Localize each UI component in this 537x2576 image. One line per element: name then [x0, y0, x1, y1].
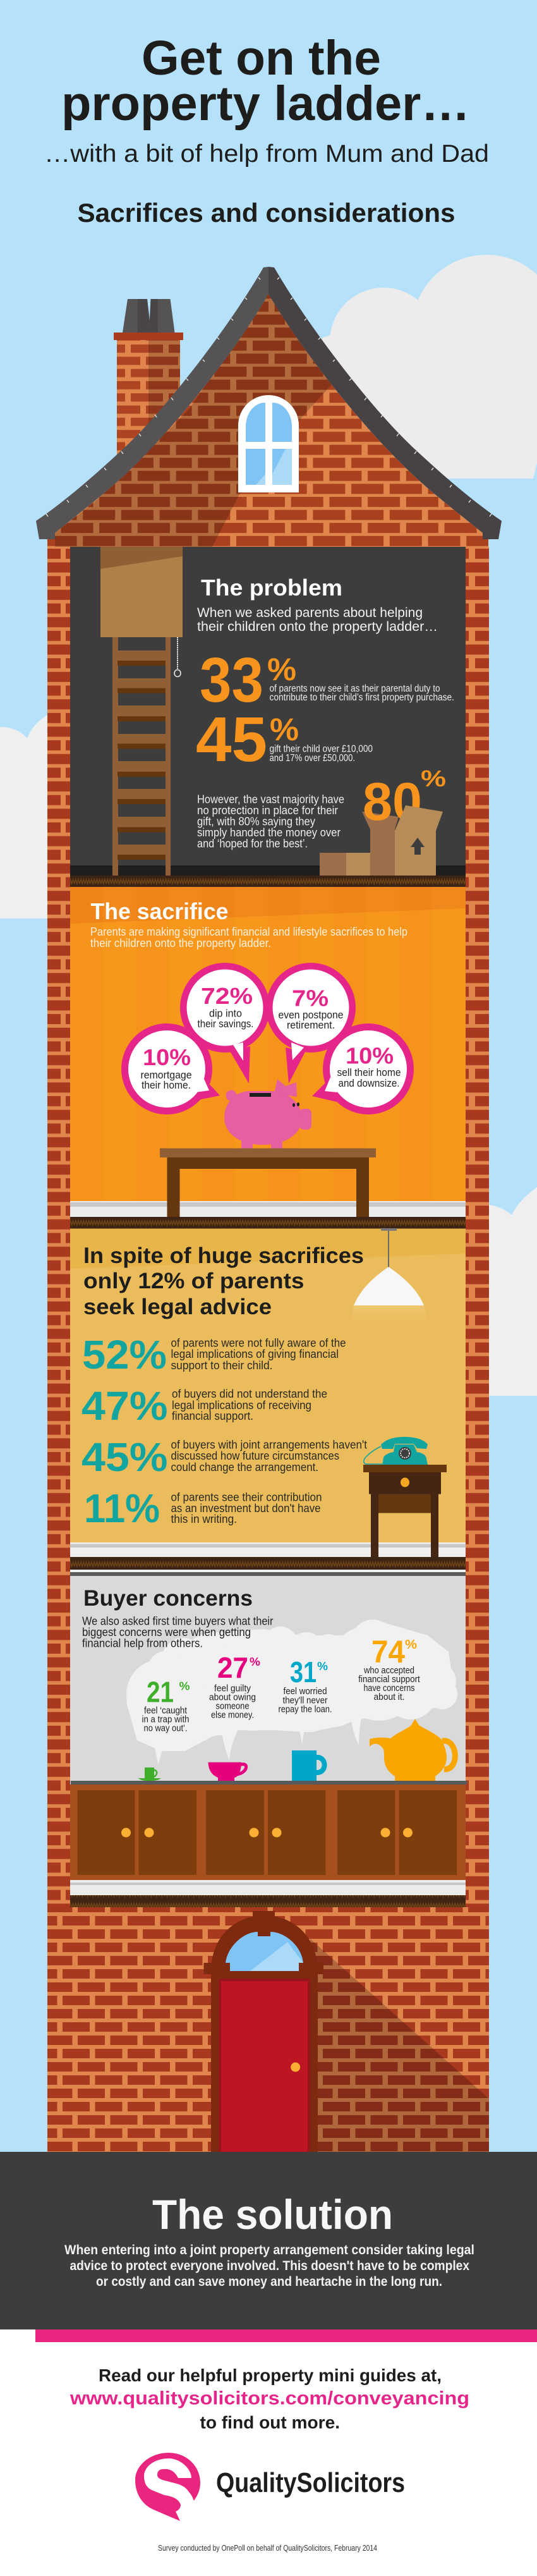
bubble: 10% downsize: 10% — [346, 1043, 394, 1068]
panel: the solution — [0, 2152, 537, 2329]
gable wall with window shadow — [47, 293, 488, 550]
stat: 45%: of buyers with joint arrangements haven't — [171, 1438, 367, 1451]
icon: orange teapot — [370, 1719, 455, 1781]
stat: 52% — [82, 1332, 346, 1377]
panel: legal advice — [70, 1228, 466, 1557]
panel: the sacrifice — [70, 887, 466, 1217]
heading: the solution: The solution — [152, 2191, 393, 2238]
stat: 27%: feel guilty — [214, 1683, 251, 1694]
window: attic — [238, 395, 299, 492]
heading: sacrifices and considerations: Sacrifices and considerations — [77, 198, 455, 228]
pink bar — [35, 2329, 537, 2342]
stat: 27% — [209, 1651, 260, 1721]
stat: 33% — [200, 645, 454, 716]
stat: 21%: 21 — [147, 1676, 174, 1709]
stat: 11%: as an investment but don't have — [171, 1501, 321, 1515]
moving boxes with 80%: % — [421, 766, 446, 791]
stat: 27%: 27 — [217, 1651, 248, 1684]
stat: 45% — [81, 1434, 367, 1480]
worktop and cupboards — [70, 1781, 467, 1880]
bubble: 10% remortgage: their home. — [142, 1079, 191, 1091]
logo: QualitySolicitors — [135, 2453, 405, 2521]
roof — [36, 267, 502, 539]
text: vast majority: gift, with 80% saying they — [197, 814, 316, 828]
text: vast majority — [197, 793, 344, 850]
stat: 11%: this in writing. — [171, 1512, 237, 1525]
call to action: Read our helpful property mini guides at, — [99, 2365, 442, 2385]
cloud: middle left — [0, 713, 63, 919]
call to action: www.qualitysolicitors.com/conveyancing — [69, 2388, 469, 2409]
stat: 45%: could change the arrangement. — [171, 1460, 318, 1474]
stat: 74%: financial support — [358, 1674, 420, 1685]
intro text: biggest concerns were when getting — [82, 1625, 251, 1639]
stat: 31%: % — [317, 1660, 328, 1673]
skirting board — [70, 1201, 466, 1217]
icon: blue mug — [292, 1750, 325, 1781]
stat: 45% — [196, 704, 373, 775]
floor joists 3 — [70, 1557, 466, 1570]
stat: 47%: 47% — [81, 1383, 168, 1429]
bubble: 7% — [278, 985, 344, 1031]
door shadow — [310, 1939, 489, 2152]
bubble: 10% remortgage: 10% — [143, 1044, 191, 1070]
stat: 74%: about it. — [374, 1692, 404, 1702]
ladder — [112, 637, 171, 876]
stat: 21% — [142, 1676, 190, 1734]
text: vast majority: and ‘hoped for the best’. — [197, 837, 308, 850]
floor joists 2 — [70, 1217, 466, 1229]
stat: 33%: 33 — [200, 645, 263, 716]
skirting board — [70, 1542, 466, 1557]
stat: 45%: gift their child over £10,000 — [269, 743, 373, 755]
intro text: financial help from others. — [82, 1637, 203, 1650]
stat: 31%: they'll never — [283, 1695, 327, 1706]
stat: 74% — [358, 1634, 420, 1702]
icon: pink cup — [208, 1762, 246, 1781]
cloud: top right — [306, 255, 537, 479]
stat: 11%: 11% — [84, 1486, 160, 1531]
bubble: 10% remortgage — [140, 1044, 192, 1091]
stat: 45%: 45 — [196, 704, 267, 775]
bubble: 10% downsize — [337, 1043, 401, 1089]
icon: piggy bank — [224, 1079, 311, 1148]
bubble: 10% downsize: sell their home — [337, 1066, 401, 1078]
floor joists 1 — [70, 876, 466, 887]
text: vast majority: However, the vast majority have — [197, 793, 344, 805]
loft hatch — [100, 547, 183, 637]
bubble: 10% remortgage: remortgage — [140, 1069, 192, 1081]
stat: 45%: discussed how future circumstances — [171, 1449, 339, 1462]
intro text: We also asked first time buyers what their — [82, 1615, 273, 1628]
icon: telephone — [364, 1437, 428, 1465]
title: property ladder… — [61, 76, 470, 131]
stat: 31%: 31 — [290, 1656, 317, 1688]
table — [160, 1148, 376, 1217]
text: vast majority: simply handed the money over — [197, 826, 341, 839]
moving boxes with 80% — [320, 766, 446, 876]
cloud: middle right — [480, 1187, 537, 1396]
heading: legal advice: seek legal advice — [83, 1295, 272, 1319]
icon: ceiling lamp — [348, 1228, 430, 1328]
stat: 21%: feel ‘caught — [144, 1706, 188, 1716]
text: vast majority: no protection in place for their — [197, 803, 338, 817]
call to action: to find out more. — [200, 2413, 340, 2433]
stat: 31%: repay the loan. — [278, 1704, 332, 1715]
stat: 11%: of parents see their contribution — [171, 1491, 322, 1503]
heading: the problem: The problem — [201, 575, 342, 601]
stat: 47%: of buyers did not understand the — [172, 1387, 327, 1400]
pull cord — [174, 637, 181, 676]
bubble: 72% — [197, 983, 254, 1030]
title — [61, 31, 470, 131]
stat: 74%: who accepted — [363, 1665, 414, 1676]
stat: 21%: % — [179, 1680, 190, 1693]
heading: buyer concerns: Buyer concerns — [83, 1586, 253, 1611]
footnote: Survey conducted by OnePoll on behalf of QualitySolicitors, February 2014 — [158, 2544, 377, 2553]
intro text — [197, 606, 438, 634]
stat: 31% — [278, 1656, 332, 1715]
icon: speech bubble S — [135, 2453, 200, 2521]
logo: QualitySolicitors: QualitySolicitors — [216, 2467, 405, 2498]
floor joists 4 — [70, 1895, 466, 1907]
moving boxes with 80%: 80 — [363, 772, 422, 831]
stat: 74%: 74 — [371, 1634, 405, 1670]
bubble: 72%: dip into — [209, 1008, 242, 1019]
heading: legal advice: In spite of huge sacrifices — [83, 1243, 364, 1268]
call to action — [69, 2365, 469, 2433]
lower brick wall — [47, 1907, 489, 2152]
solution text: or costly and can save money and heartache in the long run. — [96, 2274, 442, 2289]
stat: 33%: contribute to their child’s first property purchase. — [269, 692, 454, 703]
stat: 52%: 52% — [82, 1332, 167, 1377]
solution text — [64, 2243, 474, 2289]
stat: 45%: % — [270, 712, 299, 747]
solution text: advice to protect everyone involved. This doesn't have to be complex — [69, 2259, 469, 2273]
heading: legal advice: only 12% of parents — [83, 1269, 305, 1293]
stat: 21%: in a trap with — [142, 1714, 190, 1725]
panel: buyer concerns — [70, 1570, 467, 1895]
subtitle: …with a bit of help from Mum and Dad — [44, 140, 489, 168]
bubble: 10% downsize: and downsize. — [339, 1077, 399, 1089]
stat: 52%: of parents were not fully aware of the — [171, 1336, 346, 1349]
stat: 27%: % — [250, 1656, 260, 1668]
steam cloud — [126, 1620, 457, 1765]
speech bubbles — [121, 963, 414, 1114]
skirting board — [70, 1880, 466, 1895]
icon: green teacup — [138, 1767, 161, 1781]
stat: 27%: else money. — [211, 1710, 254, 1721]
bubble: 7%: 7% — [292, 985, 329, 1011]
stat: 74%: have concerns — [364, 1683, 414, 1694]
intro text: their children onto the property ladder. — [90, 936, 271, 949]
title: Get on the — [142, 31, 381, 85]
chimney — [114, 299, 183, 460]
bubble: 72%: their savings. — [197, 1018, 254, 1030]
intro text — [82, 1615, 273, 1650]
intro text — [90, 925, 407, 949]
stat: 52%: legal implications of giving financial — [171, 1347, 339, 1360]
stat: 52%: support to their child. — [171, 1358, 273, 1372]
stat: 33%: % — [267, 652, 296, 687]
side walls — [47, 547, 489, 1907]
stat: 27%: about owing — [209, 1692, 256, 1703]
heading: the sacrifice: The sacrifice — [91, 898, 229, 924]
bubble: 72%: 72% — [201, 983, 253, 1009]
intro text: Parents are making significant financial and lifestyle sacrifices to help — [90, 925, 407, 938]
stat: 47%: legal implications of receiving — [172, 1398, 311, 1412]
front door — [203, 1911, 323, 2152]
stat: 45%: and 17% over £50,000. — [269, 753, 355, 764]
stat: 27%: someone — [216, 1701, 249, 1712]
stat: 31%: feel worried — [283, 1686, 327, 1697]
bubble: 7%: retirement. — [287, 1019, 335, 1031]
side table — [363, 1465, 447, 1557]
stat: 21%: no way out’. — [144, 1723, 187, 1734]
stat: 47%: financial support. — [172, 1409, 253, 1422]
solution text: When entering into a joint property arrangement consider taking legal — [64, 2243, 474, 2257]
bubble: 7%: even postpone — [278, 1009, 344, 1021]
stat: 33%: of parents now see it as their parental duty to — [269, 683, 440, 694]
stat: 11% — [84, 1486, 322, 1531]
heading: legal advice — [83, 1243, 364, 1319]
panel: the problem — [70, 547, 466, 876]
intro text: their children onto the property ladder… — [197, 620, 438, 634]
stat: 74%: % — [405, 1638, 417, 1652]
intro text: When we asked parents about helping — [197, 606, 423, 620]
stat: 45%: 45% — [81, 1434, 168, 1480]
stat: 47% — [81, 1383, 327, 1429]
